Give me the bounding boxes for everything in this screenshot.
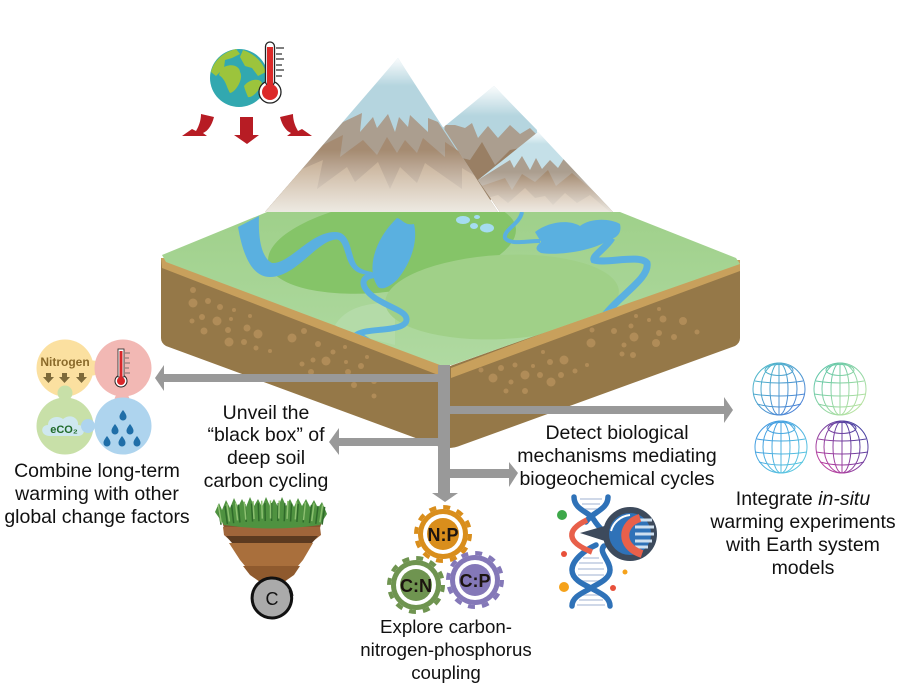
panel: global change factors	[4, 340, 190, 528]
carbon cycle circle: C	[266, 589, 278, 609]
arrow: left to black box	[329, 428, 439, 455]
mountains	[260, 55, 620, 220]
dna strands	[572, 497, 610, 606]
soil block	[161, 212, 740, 448]
light meadow	[386, 255, 619, 340]
thermometer	[259, 42, 284, 103]
dots	[557, 510, 628, 592]
icon: coupled gears	[389, 507, 502, 612]
left lake	[372, 218, 415, 288]
mountain: back right	[443, 86, 538, 200]
text: detect mechanisms: Detect biological	[545, 422, 689, 444]
grid sphere 1	[753, 363, 805, 415]
ponds	[456, 215, 494, 232]
text: explore coupling: coupling	[411, 662, 481, 683]
grass	[215, 497, 327, 528]
eCO2 circle: eCO₂	[50, 424, 78, 436]
magnifier	[580, 510, 654, 558]
soil band	[161, 258, 740, 378]
grid sphere 3	[755, 421, 807, 473]
text: integrate: models	[772, 557, 835, 579]
nitrogen circle: Nitrogen	[40, 355, 90, 369]
text: explore coupling: Explore carbon-	[380, 616, 512, 637]
text: unveil black box: deep soil	[227, 447, 305, 469]
red arrows	[182, 114, 312, 144]
text: integrate: with Earth system	[725, 534, 880, 556]
text: explore coupling: nitrogen-phosphorus	[360, 639, 532, 660]
lower river	[358, 275, 407, 344]
text: unveil black box: carbon cycling	[204, 470, 328, 492]
eCO2 circle	[36, 386, 94, 454]
text: detect mechanisms: biogeochemical cycles	[519, 468, 715, 490]
right lake	[535, 220, 620, 254]
icon: Earth system model grids	[753, 363, 868, 473]
text: combine: Combine long-term	[14, 460, 180, 482]
grass top face	[162, 212, 740, 365]
text: unveil black box: “black box” of	[207, 424, 325, 446]
mountain: front right	[478, 132, 613, 212]
globe	[210, 49, 268, 107]
text: detect mechanisms: mechanisms mediating	[517, 445, 717, 467]
icon: DNA under magnifier	[557, 497, 654, 606]
text: integrate: warming experiments	[709, 511, 896, 533]
soil sides	[161, 258, 740, 448]
precipitation circle	[81, 398, 152, 454]
warming circle	[94, 340, 152, 408]
arrow: trunk down to gears	[432, 365, 458, 502]
grid sphere 2	[814, 363, 866, 415]
arrow: left to global change factors	[155, 365, 439, 391]
gear N:P: N:P	[428, 525, 458, 545]
right lower river	[594, 238, 647, 316]
arrow: right to biological mechanisms	[450, 462, 518, 487]
right top river	[505, 212, 540, 242]
icon: soil core with carbon cycle	[215, 497, 327, 618]
mountain: main peak	[260, 55, 500, 215]
dna red strand	[572, 520, 592, 552]
text: combine: warming with other	[14, 483, 179, 505]
dark green meadow	[268, 212, 516, 294]
nitrogen circle	[36, 340, 100, 396]
grid sphere 4	[816, 421, 868, 473]
text: combine: global change factors	[4, 506, 190, 528]
text: integrate: Integrate in-situ	[736, 488, 870, 510]
left river	[238, 216, 372, 277]
arrows	[155, 365, 733, 502]
arrow: right to Earth system models	[450, 397, 733, 423]
dna rungs	[577, 499, 605, 605]
gear C:P: C:P	[460, 571, 490, 591]
gear C:N: C:N	[400, 576, 432, 596]
pebbles	[188, 287, 700, 398]
soil layers	[222, 521, 322, 582]
icon: warming earth	[182, 42, 312, 144]
text: unveil black box: Unveil the	[223, 402, 309, 424]
